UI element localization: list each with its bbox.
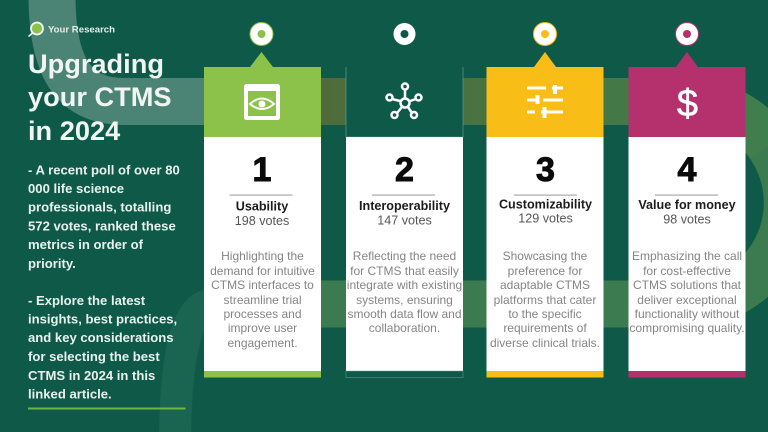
description: demand for intuitive [210,264,315,278]
vote count: 98 votes [663,212,711,226]
text block: article description: for selecting the best [28,349,160,364]
vote count: 198 votes [235,214,289,228]
title: in 2024 [28,115,120,146]
description: Showcasing the [503,249,588,263]
metric name: Interoperability [359,199,450,213]
text block: poll description [28,162,180,271]
footer bar [628,371,746,378]
rank number: 3 [536,151,555,189]
title: your CTMS [28,81,172,112]
text block: article description: and key considerations [28,330,174,345]
panel: interoperability [346,23,463,378]
description: CTMS solutions that [633,278,742,292]
description: for cost-effective [643,264,731,278]
description: Reflecting the need [353,249,456,263]
description: smooth data flow and [347,307,462,321]
text block: poll description: 572 votes, ranked these [28,218,176,234]
description: improve user [228,321,297,335]
marker dot [534,22,556,46]
metric name: Value for money [638,198,736,212]
description: for CTMS that easily [350,264,459,278]
text block: article description: - Explore the latest [28,293,146,308]
logo: Your Research: Your Research [48,24,115,36]
rank number: 4 [678,151,697,189]
card header [628,52,746,137]
card header [486,52,604,137]
description: functionality without [635,307,740,321]
description: streamline trial [223,293,302,307]
card header [204,52,321,137]
rank number: 1 [253,151,271,189]
text block: article description: linked article. [28,386,112,402]
icon: eye in window [244,84,280,120]
text block: article description: CTMS in 2024 in this [28,368,155,383]
marker dot [250,22,273,46]
rank number: 2 [395,151,414,189]
logo: Your Research [28,22,115,36]
text block: poll description: professionals, totalling [28,200,171,214]
panel: customizability [486,22,604,378]
description: diverse clinical trials. [490,336,600,350]
panel: usability [204,22,321,378]
description: requirements of [503,321,587,335]
description: processes and [223,307,302,321]
text block: poll description: metrics in order of [28,237,144,252]
vote count: 147 votes [377,214,432,228]
icon: network hub [386,84,422,118]
description [347,249,462,335]
description: adaptable CTMS [500,278,590,292]
footer bar [346,371,463,378]
description: to the specific [508,307,582,321]
text block: article description: insights, best practices, [28,312,177,326]
text block: article description [28,293,177,402]
description: collaboration. [369,321,440,335]
title: Upgrading [28,48,164,79]
icon: sliders [527,85,563,118]
description [629,249,745,335]
metric name: Customizability [499,198,592,212]
description [490,249,600,350]
description: preference for [508,264,582,278]
marker dot [394,23,416,45]
description [210,249,315,350]
description: integrate with existing [347,278,462,292]
text block: poll description: 000 life science [28,181,124,196]
description: engagement. [227,336,298,350]
panel: value for money [628,22,746,378]
description: compromising quality. [629,321,745,335]
card body [628,137,746,371]
footer bar [486,371,604,378]
description: Highlighting the [221,249,304,263]
card body [486,137,604,371]
icon: dollar sign: $ [677,83,698,125]
card header [346,67,463,137]
description: CTMS interfaces to [211,278,314,292]
description: systems, ensuring [356,293,453,307]
underline accent [28,408,186,410]
metric name: Usability [236,200,288,214]
description: deliver exceptional [637,293,737,307]
text block: poll description: priority. [28,256,76,271]
vote count: 129 votes [518,212,573,226]
card body [204,137,321,371]
footer bar [204,371,321,378]
description: platforms that cater [494,293,596,307]
marker dot [676,22,698,46]
text block: poll description: - A recent poll of over 80 [28,162,180,178]
description: Emphasizing the call [632,249,742,263]
title [28,48,172,146]
card body [346,137,463,371]
